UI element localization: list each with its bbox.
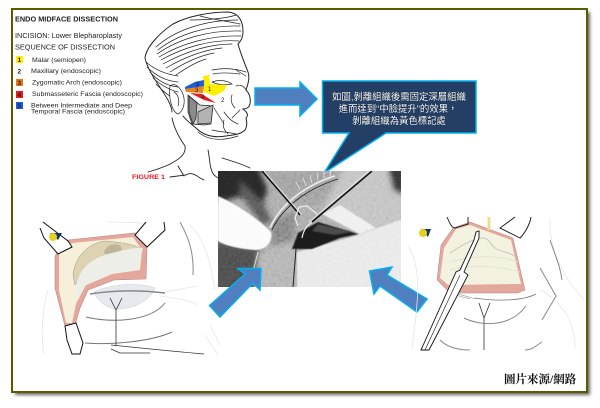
source credit: 圖片來源/網路 (504, 372, 577, 386)
face illustration: 4 (201, 95, 205, 101)
yellow marker (49, 233, 62, 241)
face illustration: 5 (196, 82, 200, 88)
legend item 4: 4 (18, 92, 22, 99)
face illustration: 2 (221, 98, 225, 104)
zone 5 blue (185, 80, 204, 89)
forceps instrument (421, 231, 479, 350)
hatching under flap (452, 294, 476, 299)
legend item 1 (16, 56, 86, 64)
blue arrow lower right (370, 267, 427, 312)
dissection zones (185, 75, 227, 103)
face illustration (145, 12, 250, 180)
right anatomy diagram (408, 217, 584, 350)
zone 4 red (190, 93, 216, 103)
upper retractors (447, 217, 531, 238)
legend item 4: Submasseteric Fascia (endoscopic) (32, 91, 143, 98)
figure 1 label: FIGURE 1 (132, 174, 165, 181)
dark upper-left tissue (218, 171, 272, 206)
film grain (218, 171, 401, 287)
incision line: INCISION: Lower Blepharoplasty (15, 33, 123, 40)
upper-left retractor (40, 222, 72, 254)
eye and lower lines (94, 285, 155, 309)
hair and head outline (145, 12, 243, 58)
legend item 5 (16, 102, 133, 116)
yellow marker (419, 229, 431, 237)
callout text: 如圖,剝離組織後需固定深層組織 (332, 91, 467, 102)
lower-left mid-grey skin (218, 240, 264, 287)
legend item 1: 1 (18, 57, 22, 64)
blue arrow to callout (255, 82, 317, 116)
faint surrounding lines (408, 218, 584, 350)
faint surrounding lines (42, 222, 220, 355)
lower lid (475, 294, 536, 300)
legend item 2: Maxillary (endoscopic) (31, 68, 101, 75)
callout text: 剝離組織為黃色標記處 (352, 115, 446, 126)
yellow mark (488, 217, 490, 230)
legend item 2: 2 (18, 68, 22, 76)
sequence heading: SEQUENCE OF DISSECTION (15, 44, 115, 52)
lashes (296, 171, 331, 190)
eye and brow (212, 69, 246, 108)
pink flap (437, 222, 525, 293)
legend item 5: Between Intermediate and Deep (31, 102, 133, 110)
tissue lines (450, 257, 520, 272)
face illustration: 1 (208, 87, 212, 93)
legend item 3: Zygomatic Arch (endoscopic) (32, 80, 122, 86)
legend item 1: Malar (semiopen) (32, 57, 86, 64)
upper-right skin (323, 171, 401, 232)
legend item 3: 3 (18, 80, 22, 87)
lash line curve (270, 176, 335, 228)
y-shaped suture (110, 298, 122, 346)
legend item 4 (16, 91, 143, 99)
face illustration: 3 (195, 88, 199, 94)
tan deep layer (73, 241, 140, 285)
y-shaped suture (479, 303, 490, 350)
upper-right retractor (135, 222, 165, 247)
hair strands (146, 15, 241, 96)
exposed masseter muscle (188, 95, 213, 125)
cream flap interior (440, 225, 521, 285)
surgical photo (218, 171, 401, 287)
incision line (293, 249, 296, 287)
gloved finger (218, 196, 271, 250)
curve in flap (450, 238, 514, 256)
legend item 5: 5 (18, 103, 22, 110)
cream layer (59, 237, 142, 323)
callout text: 進而達到“中臉提升”的效果， (339, 103, 457, 114)
white fold (76, 248, 143, 300)
legend item 3 (16, 79, 122, 87)
callout (322, 81, 476, 173)
face profile (183, 44, 250, 137)
left anatomy diagram (40, 222, 220, 355)
ear (169, 85, 184, 114)
wrinkles (198, 108, 240, 139)
zone 3 orange (185, 86, 204, 93)
callout text (332, 91, 467, 126)
lower retractor (65, 323, 83, 354)
lower-right bright skin (296, 219, 401, 287)
legend title: ENDO MIDFACE DISSECTION (15, 14, 118, 24)
pink flap (55, 233, 147, 326)
blue arrow lower left (210, 268, 261, 317)
everted dark eyelid (292, 222, 358, 249)
instruments (262, 171, 300, 215)
back of head and neck (145, 58, 250, 180)
white flap strip (322, 205, 376, 234)
callout box with tail (322, 81, 476, 173)
legend item 5: Temporal Fascia (endoscopic) (31, 108, 125, 116)
legend: endo midface dissection (15, 14, 143, 116)
zone 1 yellow (203, 75, 227, 96)
